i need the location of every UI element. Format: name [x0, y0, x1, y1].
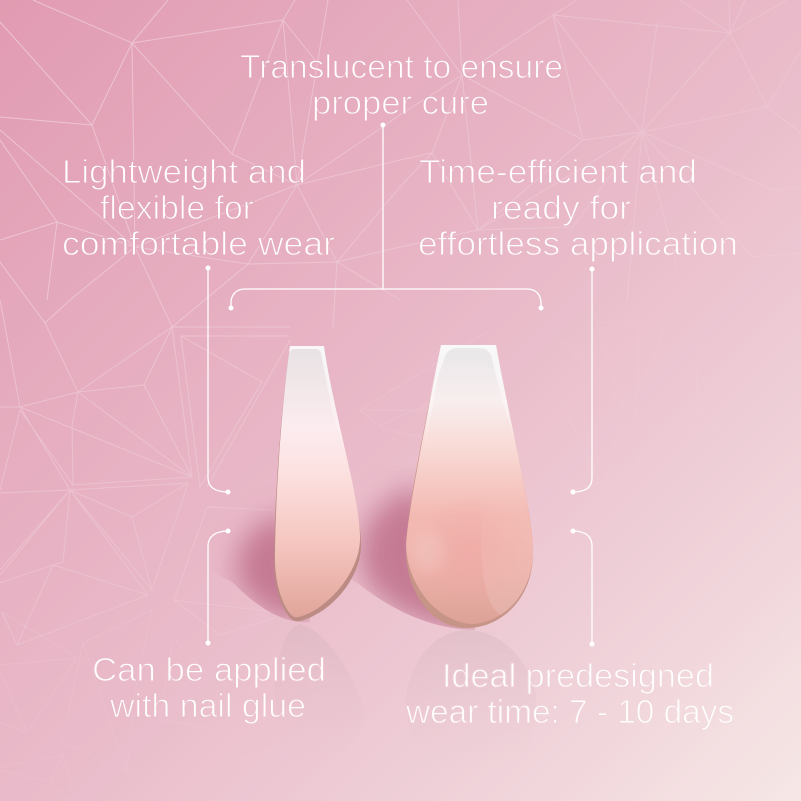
nail: right	[406, 345, 533, 628]
connector: top bracket	[228, 122, 544, 310]
text: time-efficient: Time-efficient and	[419, 154, 697, 191]
connector: lower left	[206, 528, 230, 646]
text: lightweight: comfortable wear	[62, 226, 335, 263]
text: translucent: proper cure	[312, 85, 489, 122]
text: nail glue: Can be applied	[92, 652, 326, 689]
text: lightweight	[62, 154, 335, 263]
text: nail glue: with nail glue	[109, 688, 306, 725]
text: translucent: Translucent to ensure	[240, 49, 563, 86]
text: wear time: wear time: 7 - 10 days	[405, 694, 734, 731]
text: time-efficient	[418, 154, 738, 263]
connector: upper right	[570, 266, 594, 494]
text: time-efficient: effortless application	[418, 226, 738, 263]
text: lightweight: flexible for	[100, 190, 254, 227]
connector lines and dots	[206, 122, 594, 646]
text: nail glue	[92, 652, 326, 725]
reflection: left nail	[275, 624, 366, 775]
text: lightweight: Lightweight and	[62, 154, 306, 191]
text: translucent	[240, 49, 563, 122]
text: time-efficient: ready for	[491, 190, 631, 227]
shadow: right nail	[360, 485, 480, 634]
text: wear time: Ideal predesigned	[442, 658, 714, 695]
nail: left	[274, 346, 361, 621]
reflection: right nail	[406, 630, 536, 770]
text: wear time	[405, 658, 734, 731]
connector: lower right	[570, 528, 594, 646]
shadow: left nail	[236, 512, 310, 626]
connector: upper left	[206, 266, 230, 494]
